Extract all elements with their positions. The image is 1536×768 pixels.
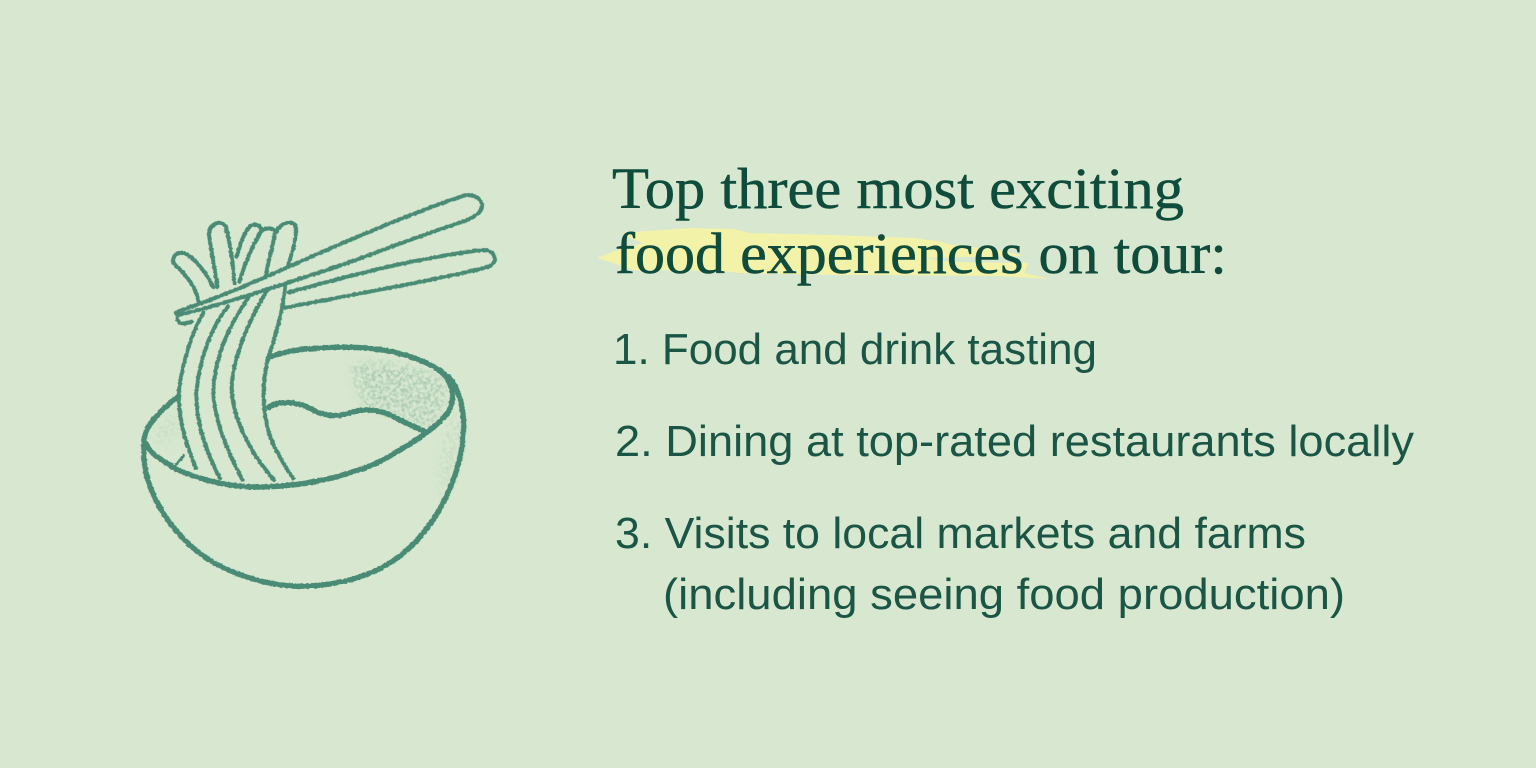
illustration: noodle bowl with chopsticks [144,195,495,586]
list item 3: (including seeing food production) [663,570,1345,619]
title [612,156,1227,286]
bowl outer curve [144,377,464,586]
small tick on the rim [175,455,184,466]
title line 1: Top three most exciting [612,156,1184,221]
list item 2: 2. Dining at top-rated restaurants locally [615,417,1414,466]
soup surface line [268,403,427,432]
noodles [173,222,296,480]
bowl rim [144,347,452,487]
front chopstick [176,195,482,314]
chopsticks [176,195,495,323]
ranked list [613,325,1414,619]
title line 2: food experiences on tour: [615,221,1227,286]
noodle strand 4 [232,291,274,480]
noodle strand 3 [213,297,248,480]
bowl outline [144,347,464,586]
list item 3 [615,509,1345,619]
back chopstick [285,250,495,308]
back chopstick left end [177,318,192,323]
bowl interior shading [150,362,463,503]
noodle strand 5 [264,285,293,478]
list item 3: 3. Visits to local markets and farms [615,509,1306,558]
noodle strand 2 [196,306,228,478]
noodle strand 1 [179,313,203,468]
noodle tops [173,253,213,301]
yellow highlight swash [597,228,1050,279]
list item 1: 1. Food and drink tasting [613,325,1097,374]
